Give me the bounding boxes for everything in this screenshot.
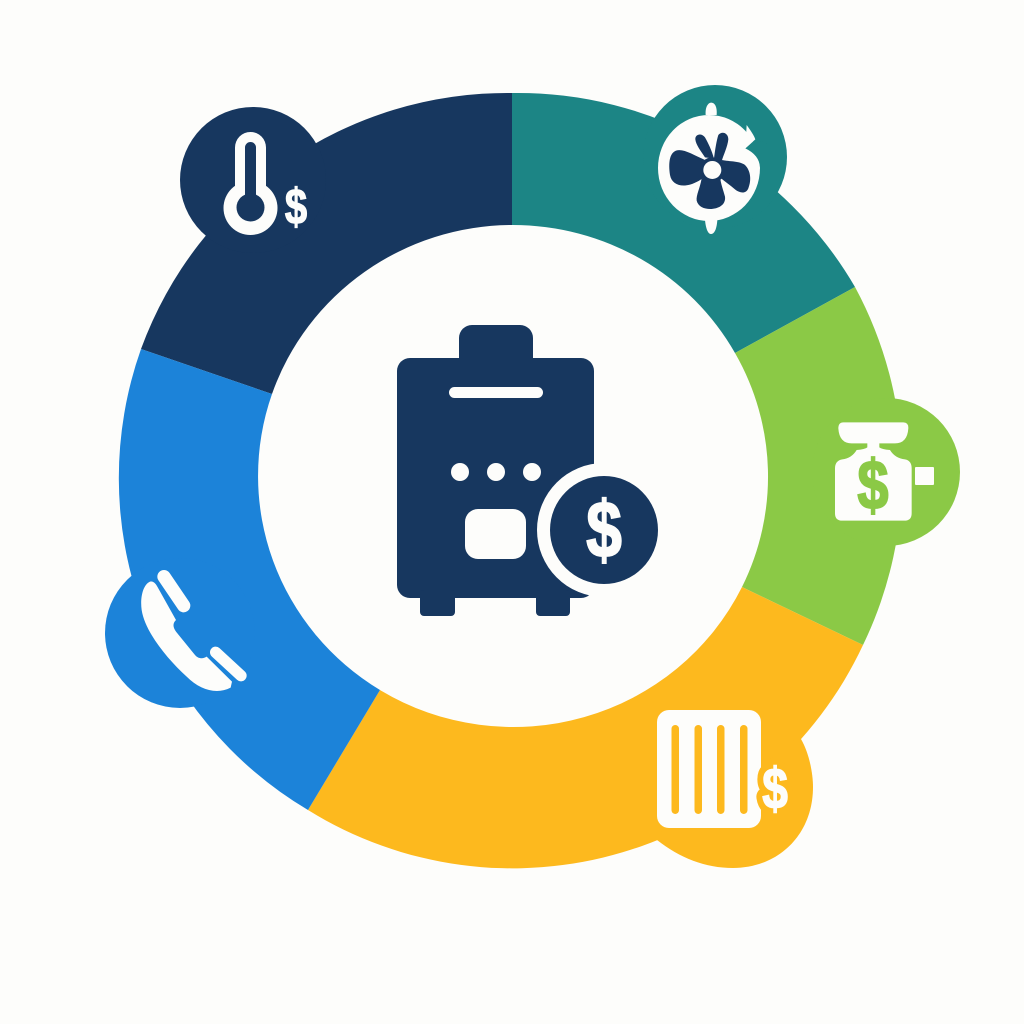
segment: green scale cost xyxy=(735,287,960,645)
icon: price scale xyxy=(835,422,934,524)
icon: radiator with dollar: $ xyxy=(762,757,788,821)
dollar coin xyxy=(537,463,671,597)
icon: telephone xyxy=(141,577,241,691)
icon: price scale: $ xyxy=(857,447,889,524)
icon: radiator with dollar xyxy=(657,710,788,828)
dollar coin: $ xyxy=(586,485,622,575)
icon: radiator with dollar: $ xyxy=(762,757,788,821)
segment: yellow radiator cost xyxy=(308,587,863,868)
icon: fan xyxy=(658,103,767,234)
segment: navy thermometer cost xyxy=(141,93,512,394)
segment: blue phone cost xyxy=(105,349,380,810)
segment: teal fan cost xyxy=(512,85,855,353)
icon: thermometer with dollar: $ xyxy=(285,179,307,235)
icon: thermometer with dollar xyxy=(224,132,307,235)
icon: water heater with dollar coin xyxy=(397,325,671,616)
heater body xyxy=(397,325,594,616)
